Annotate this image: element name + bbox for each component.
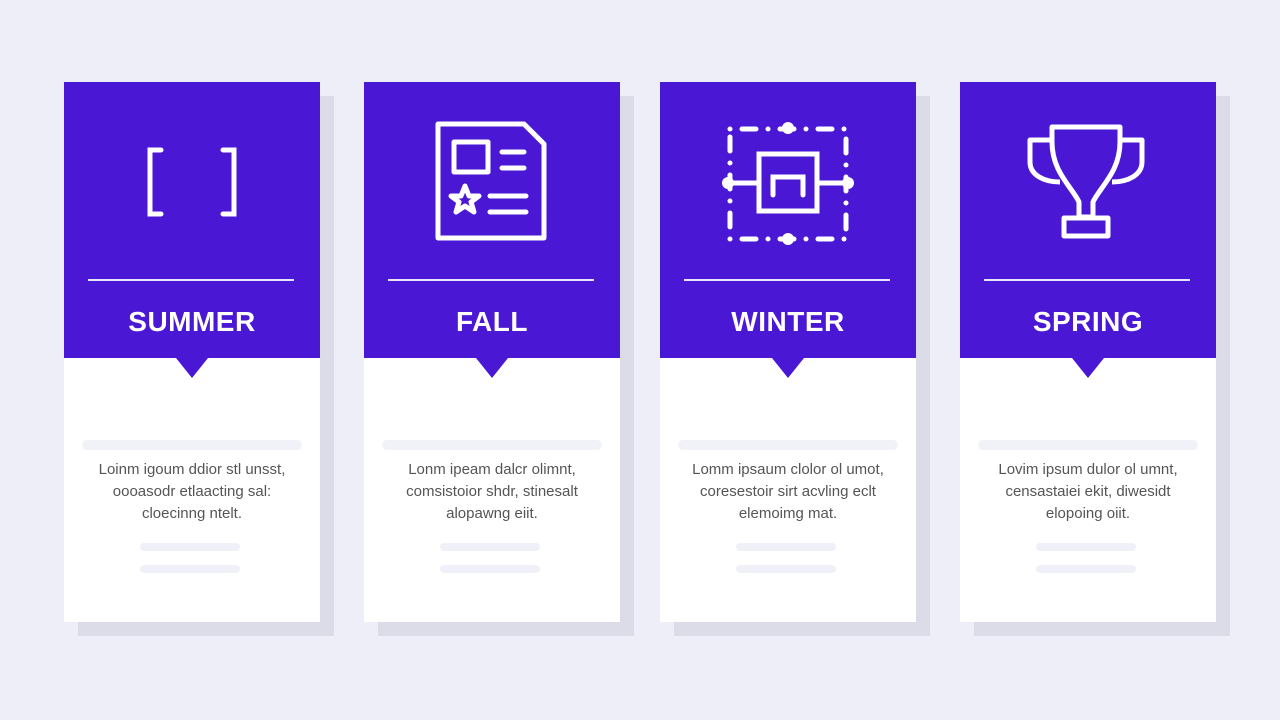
text: spring: censastaiei ekit, diwesidt — [1005, 483, 1171, 500]
heading: fall: FALL — [456, 306, 528, 337]
text: summer — [99, 461, 285, 522]
text: fall: Lonm ipeam dalcr olimnt, — [408, 461, 576, 478]
text: fall: comsistoior shdr, stinesalt — [406, 483, 578, 500]
text: winter: elemoimg mat. — [739, 505, 837, 522]
heading: winter: WINTER — [731, 306, 845, 337]
icon: trophy — [1028, 124, 1144, 238]
text: fall: alopawng eiit. — [446, 505, 538, 522]
text: winter: Lomm ipsaum clolor ol umot, — [692, 461, 884, 478]
text: winter — [692, 461, 884, 522]
heading: summer: SUMMER — [128, 306, 256, 337]
card: winter — [660, 82, 916, 622]
text: summer: cloecinng ntelt. — [142, 505, 242, 522]
card: fall — [364, 82, 620, 622]
text: spring: elopoing oiit. — [1046, 505, 1130, 522]
text: spring — [998, 461, 1178, 522]
text: spring: Lovim ipsum dulor ol umnt, — [998, 461, 1178, 478]
card: spring — [960, 82, 1216, 622]
text: fall — [406, 461, 578, 522]
icon: document with star — [436, 122, 546, 240]
text: winter: coresestoir sirt acvling eclt — [700, 483, 876, 500]
text: summer: Loinm igoum ddior stl unsst, — [99, 461, 285, 478]
heading: spring: SPRING — [1033, 306, 1143, 337]
icon: brackets — [148, 148, 236, 216]
card: summer — [64, 82, 320, 622]
text: summer: oooasodr etlaacting sal: — [113, 483, 271, 500]
icon: dashed frame — [722, 122, 854, 245]
